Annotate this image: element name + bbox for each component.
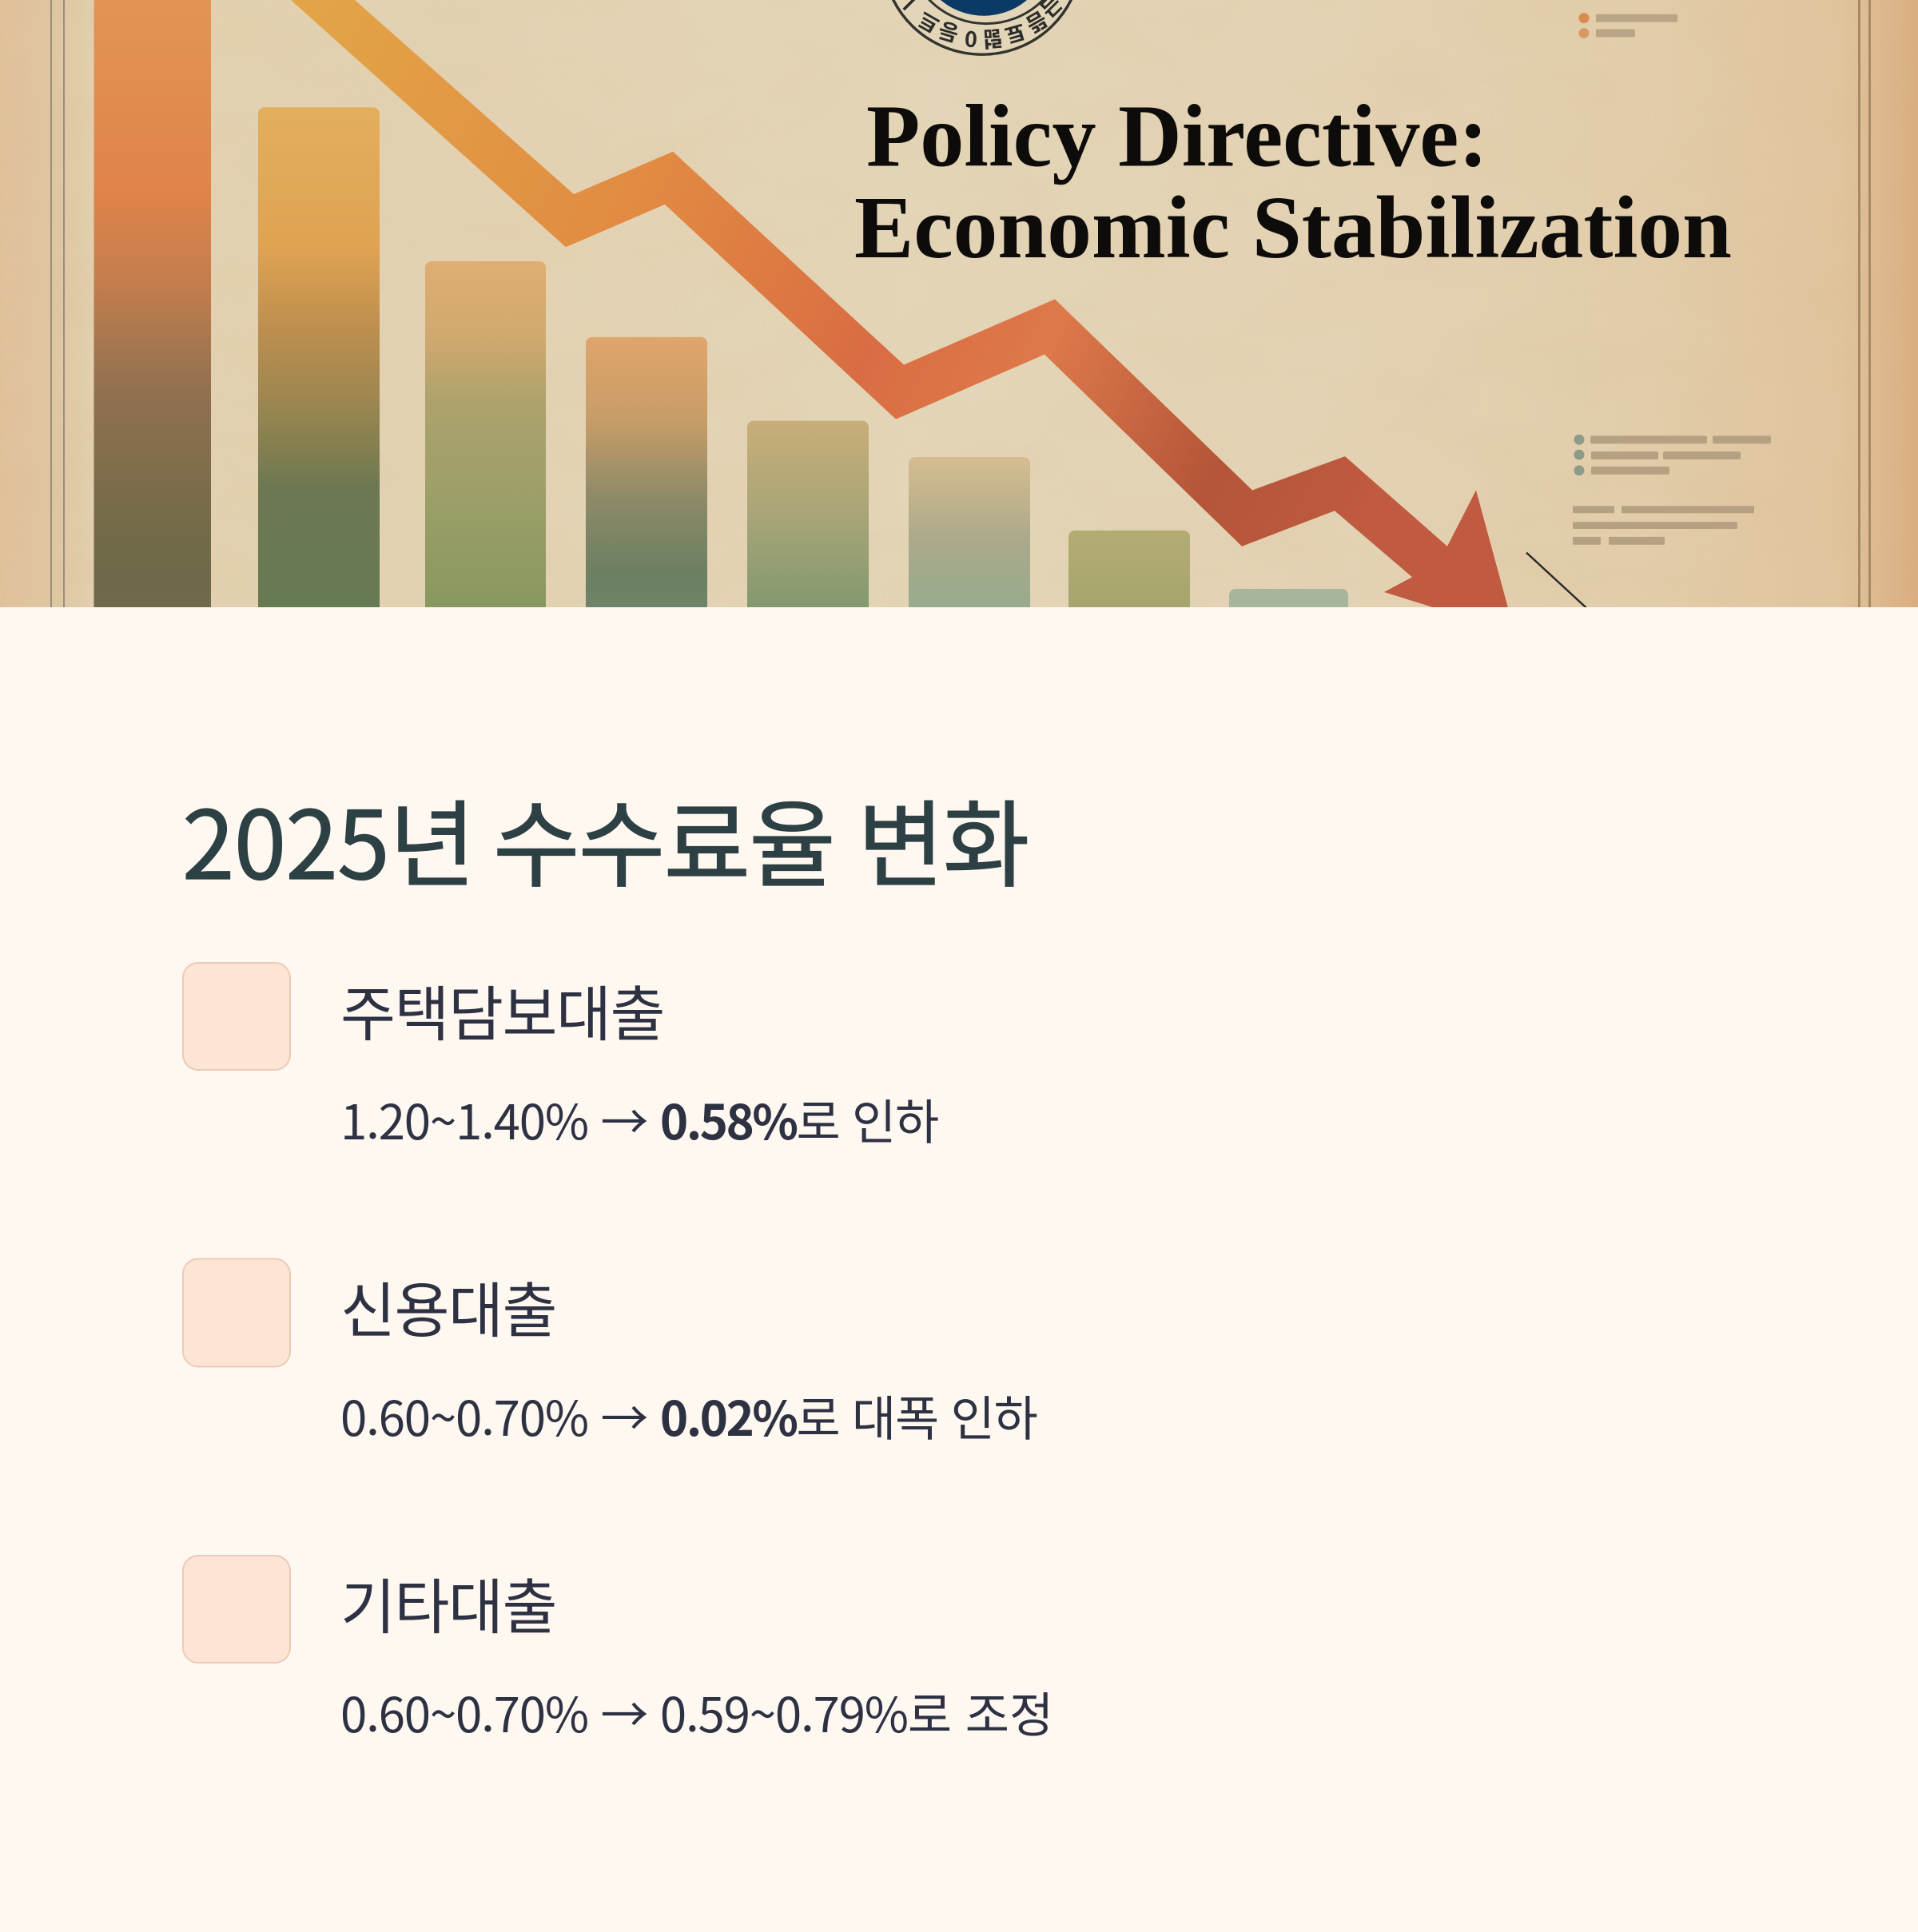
legend marks: top right [1579,13,1677,38]
item description: 1.20~1.40% → 0.58%로 인하 [340,1084,938,1154]
heading: 2025년 [182,769,472,906]
panel: mortgage loan item [183,963,938,1154]
icon: circular seal [883,0,1081,57]
item description: 0.60~0.70% → 0.02%로 대폭 인하 [340,1381,1037,1450]
item title: 주택담보대출 [340,966,664,1053]
poster title: Economic Stabilization [854,179,1732,277]
icon: empty rounded box [183,1259,290,1366]
legend marks: lower right [1573,506,1754,545]
thin black diagonal line [1526,553,1586,608]
icon: empty rounded box [183,1556,290,1663]
poster title: Policy Directive: [866,87,1488,185]
icon: circular seal: 등 [934,15,962,51]
panel: credit loan item [183,1259,1037,1450]
icon: circular seal: 럶 [981,24,1004,57]
bar chart: declining bars [94,0,1348,608]
icon: circular seal: 툐 [1001,17,1029,53]
legend marks: middle right [1574,435,1771,475]
panel: hero poster illustration [0,0,1918,608]
panel: other loan item [183,1556,1053,1747]
icon: empty rounded box [183,963,290,1070]
parchment background [0,0,1918,608]
heading: 변화 [858,769,1029,906]
poster title [855,104,1731,258]
arrow: falling trend line [291,0,1508,608]
item title: 신용대출 [340,1262,556,1350]
icon: circular seal: 뜸 [1021,6,1054,42]
item title: 기타대출 [340,1559,556,1646]
item description: 0.60~0.70% → 0.59~0.79%로 조정 [340,1677,1053,1747]
icon: circular seal: 0 [964,25,978,56]
heading [182,769,1029,906]
icon: circular seal: 트 [911,6,945,42]
heading: 수수료율 [493,769,834,906]
